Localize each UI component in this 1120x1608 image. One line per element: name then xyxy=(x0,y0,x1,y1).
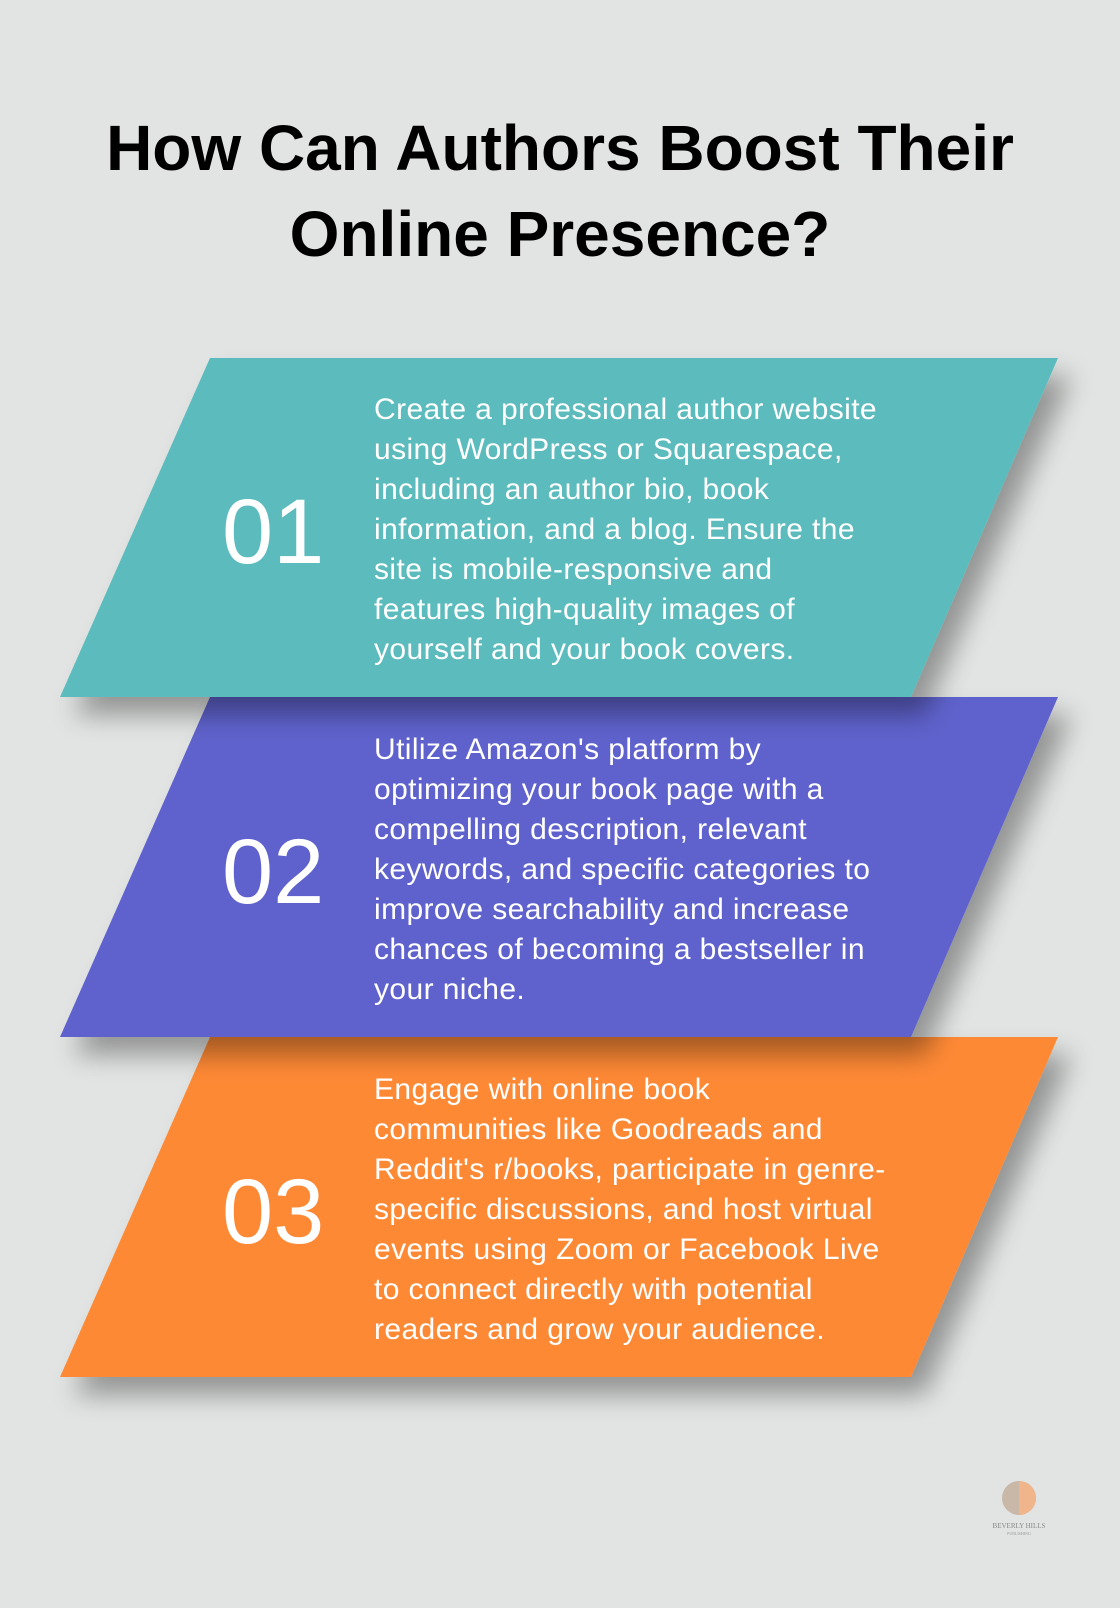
panel: step 1 xyxy=(60,358,1058,697)
text: step 2: keywords, and specific categories to xyxy=(374,853,870,886)
text: step 1: site is mobile-responsive and xyxy=(374,553,772,586)
title: How Can Authors Boost Their xyxy=(106,112,1014,184)
number 03: 03 xyxy=(222,1161,324,1263)
text: step 1: yourself and your book covers. xyxy=(374,633,795,666)
text: step 2: chances of becoming a bestseller in xyxy=(374,933,865,966)
panel: step 2 xyxy=(60,697,1058,1037)
text: step 3: events using Zoom or Facebook Live xyxy=(374,1233,880,1266)
text: step 3: Engage with online book xyxy=(374,1073,711,1106)
text: step 3: communities like Goodreads and xyxy=(374,1113,823,1146)
text: step 2: compelling description, relevant xyxy=(374,813,807,846)
text: step 1: features high-quality images of xyxy=(374,593,795,626)
logo xyxy=(993,1481,1046,1536)
logo: BEVERLY HILLS xyxy=(993,1522,1046,1530)
text: step 1: using WordPress or Squarespace, xyxy=(374,433,843,466)
text: step 1: information, and a blog. Ensure the xyxy=(374,513,855,546)
title: Online Presence? xyxy=(290,198,830,270)
text: step 1 xyxy=(374,393,877,666)
text: step 3: to connect directly with potential xyxy=(374,1273,813,1306)
text: step 2: Utilize Amazon's platform by xyxy=(374,733,761,766)
text: step 2: optimizing your book page with a xyxy=(374,773,824,806)
panel: step 3 xyxy=(60,1037,1058,1377)
text: step 3: specific discussions, and host virtual xyxy=(374,1193,873,1226)
text: step 2: your niche. xyxy=(374,973,525,1006)
text: step 2 xyxy=(374,733,870,1006)
text: step 3: readers and grow your audience. xyxy=(374,1313,825,1346)
text: step 1: Create a professional author website xyxy=(374,393,877,426)
title xyxy=(106,112,1014,270)
text: step 2: improve searchability and increase xyxy=(374,893,850,926)
text: step 1: including an author bio, book xyxy=(374,473,770,506)
number 02: 02 xyxy=(222,821,324,923)
text: step 3 xyxy=(374,1073,886,1346)
number 01: 01 xyxy=(222,481,324,583)
text: step 3: Reddit's r/books, participate in genre- xyxy=(374,1153,886,1186)
logo: PUBLISHING xyxy=(1007,1531,1031,1536)
